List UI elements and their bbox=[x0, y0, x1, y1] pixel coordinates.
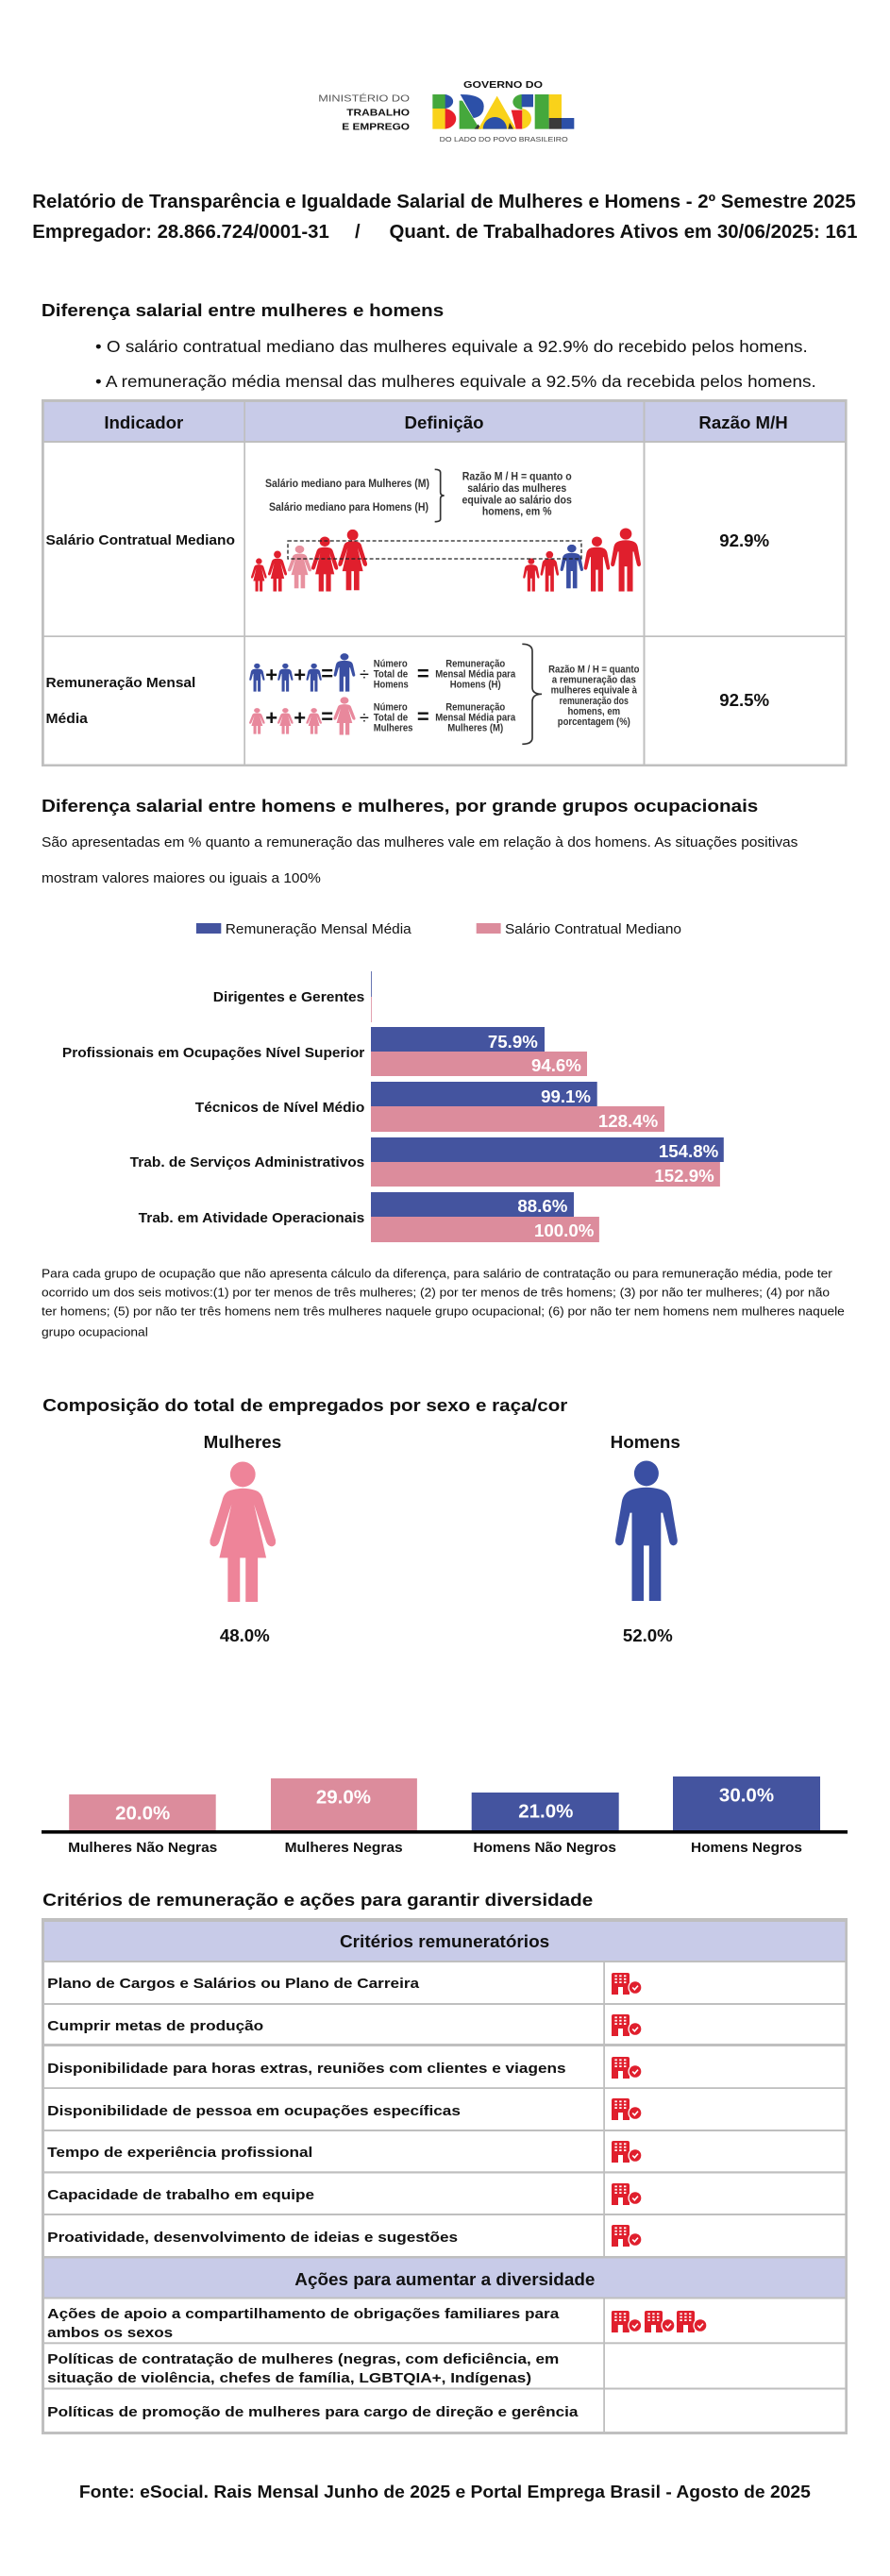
diagram: remuneração média: mulheres equivale à bbox=[551, 685, 637, 697]
diagram: salário mediano: Salário mediano para Homens (H) bbox=[269, 502, 428, 514]
bar chart: grupos ocupacionais: 75.9% bbox=[488, 1032, 538, 1052]
row labels: ações: situação de violência, chefes de família, LGBTQIA+, Indígenas) bbox=[47, 2371, 531, 2386]
text block: nota de rodapé bbox=[42, 1267, 845, 1339]
bar chart: grupos ocupacionais: Técnicos de Nível Médio bbox=[195, 1101, 364, 1116]
bar chart: grupos ocupacionais: 88.6% bbox=[517, 1196, 568, 1216]
panel: homens bbox=[611, 1432, 680, 1645]
text block: explicação: mostram valores maiores ou iguais a 100% bbox=[42, 871, 321, 886]
diagram: remuneração média: homens, em bbox=[567, 706, 620, 717]
row label: remuneração mensal média bbox=[45, 676, 195, 727]
row labels: critérios: Disponibilidade de pessoa em ocupações específicas bbox=[47, 2104, 461, 2119]
diagram: remuneração média: = bbox=[417, 662, 429, 685]
value: 92.5%: 92.5% bbox=[719, 690, 770, 710]
bar chart: grupos ocupacionais: Trab. de Serviços Administrativos bbox=[130, 1155, 364, 1170]
diagram: remuneração média: ÷ bbox=[360, 708, 369, 727]
bar chart: sexo e raça/cor: 21.0% bbox=[518, 1801, 573, 1822]
bar chart: sexo e raça/cor: Mulheres Negras bbox=[285, 1841, 403, 1856]
row labels: critérios: Proatividade, desenvolvimento de ideias e sugestões bbox=[47, 2231, 458, 2246]
row labels: critérios: Cumprir metas de produção bbox=[47, 2019, 263, 2034]
bar chart: grupos ocupacionais: Profissionais em Ocupações Nível Superior bbox=[62, 1046, 365, 1061]
text block: explicação: São apresentadas em % quanto a remuneração das mulheres vale em relação à dos homens. As situações positivas bbox=[42, 835, 798, 850]
bar chart: grupos ocupacionais: 128.4% bbox=[598, 1111, 659, 1131]
diagram: remuneração média: porcentagem (%) bbox=[558, 716, 630, 728]
row labels: ações: ambos os sexos bbox=[47, 2326, 173, 2341]
bar chart: grupos ocupacionais bbox=[62, 971, 724, 1242]
logo: ministério do trabalho e governo do brasil bbox=[318, 80, 574, 143]
title: Quant. de Trabalhadores Ativos em 30/06/2025: 161 bbox=[389, 222, 857, 243]
heading: grupos ocupacionais: Diferença salarial entre homens e mulheres, por grande grupos ocupacionais bbox=[42, 796, 758, 816]
diagram: remuneração média: + bbox=[265, 663, 277, 687]
diagram: remuneração média: remuneração dos bbox=[560, 696, 629, 707]
diagram: remuneração média: + bbox=[294, 663, 306, 687]
diagram: remuneração média: Mulheres (M) bbox=[447, 723, 504, 734]
header: ações para aumentar a diversidade: Ações para aumentar a diversidade bbox=[294, 2269, 595, 2289]
legend: Remuneração Mensal Média bbox=[226, 922, 412, 937]
value: 48.0%: 48.0% bbox=[220, 1625, 270, 1645]
diagram: remuneração média: Mensal Média para bbox=[435, 668, 515, 680]
text block: bullets bbox=[95, 337, 816, 391]
diagram: remuneração média: a remuneração das bbox=[552, 674, 636, 685]
row label: salário contratual mediano: Salário Contratual Mediano bbox=[45, 533, 235, 548]
diagram: remuneração média: Mulheres bbox=[374, 723, 412, 734]
row labels: critérios: Disponibilidade para horas extras, reuniões com clientes e viagens bbox=[47, 2062, 566, 2077]
diagram: remuneração média: Remuneração bbox=[445, 702, 506, 714]
table headers: Razão M/H bbox=[698, 412, 788, 432]
bar chart: grupos ocupacionais: Trab. em Atividade Operacionais bbox=[139, 1211, 364, 1226]
diagram: salário mediano: homens, em % bbox=[482, 507, 552, 518]
panel: tabela indicador bbox=[42, 399, 848, 766]
diagram: remuneração média: Remuneração bbox=[445, 659, 506, 670]
bar chart: sexo e raça/cor: Homens Não Negros bbox=[473, 1841, 616, 1856]
row labels: critérios bbox=[47, 1977, 566, 2246]
diagram: remuneração média: Total de bbox=[374, 712, 408, 723]
diagram: remuneração média bbox=[249, 644, 640, 744]
text block: bullets: • O salário contratual mediano das mulheres equivale a 92.9% do recebido pelos homens. bbox=[95, 337, 808, 356]
heading: critérios: Critérios de remuneração e ações para garantir diversidade bbox=[42, 1890, 593, 1910]
text block: nota de rodapé: ter homens; (5) por não ter três homens nem três mulheres naquele grupo ocupacional; (6) por não ter nem homens nem mulheres naquele bbox=[42, 1305, 845, 1318]
heading: composição: Composição do total de empregados por sexo e raça/cor bbox=[42, 1395, 567, 1415]
bar chart: grupos ocupacionais: Dirigentes e Gerentes bbox=[213, 990, 364, 1005]
bar chart: sexo e raça/cor: Homens Negros bbox=[691, 1841, 802, 1856]
text block: nota de rodapé: ocorrido um dos seis motivos:(1) por ter menos de três mulheres; (2) por ter menos de três homens; (3) por não ter mulheres; (4) por não bbox=[42, 1286, 830, 1299]
value: 92.9%: 92.9% bbox=[719, 530, 770, 550]
logo: ministério do trabalho e governo do brasil: E EMPREGO bbox=[342, 123, 410, 132]
row labels: critérios: Plano de Cargos e Salários ou Plano de Carreira bbox=[47, 1977, 420, 1992]
diagram: salário mediano: Salário mediano para Mulheres (M) bbox=[265, 479, 429, 490]
row labels: critérios: Capacidade de trabalho em equipe bbox=[47, 2188, 314, 2203]
table headers: Definição bbox=[405, 412, 483, 432]
diagram: remuneração média: Número bbox=[374, 659, 408, 670]
diagram: remuneração média: + bbox=[294, 706, 306, 730]
title: Empregador: 28.866.724/0001-31 bbox=[32, 222, 329, 243]
bar chart: grupos ocupacionais: 154.8% bbox=[659, 1141, 719, 1161]
row labels: ações: Ações de apoio a compartilhamento de obrigações familiares para bbox=[47, 2307, 560, 2322]
bar chart: grupos ocupacionais: 94.6% bbox=[531, 1055, 581, 1075]
row labels: critérios: Tempo de experiência profissional bbox=[47, 2146, 312, 2161]
icons: empresa com ações bbox=[612, 2311, 708, 2332]
value: 52.0%: 52.0% bbox=[623, 1625, 673, 1645]
header: critérios remuneratórios: Critérios remuneratórios bbox=[340, 1931, 549, 1951]
diagram: remuneração média: Homens bbox=[374, 680, 409, 691]
title bbox=[32, 192, 858, 243]
text block: bullets: • A remuneração média mensal das mulheres equivale a 92.5% da recebida pelos homens. bbox=[95, 372, 816, 391]
diagram: salário mediano: salário das mulheres bbox=[467, 483, 566, 495]
diagram: remuneração média: Total de bbox=[374, 668, 408, 680]
bar chart: sexo e raça/cor bbox=[42, 1776, 848, 1856]
diagram: salário mediano: Razão M / H = quanto o bbox=[462, 472, 572, 483]
icon: mulher bbox=[210, 1461, 276, 1602]
icon: homem bbox=[615, 1460, 678, 1601]
diagram: remuneração média: = bbox=[321, 704, 333, 729]
diagram: remuneração média: Número bbox=[374, 702, 408, 714]
logo: ministério do trabalho e governo do brasil: GOVERNO DO bbox=[463, 80, 543, 91]
diagram: salário mediano bbox=[251, 469, 641, 592]
row label: remuneração mensal média: Média bbox=[45, 712, 89, 727]
diagram: remuneração média: Razão M / H = quanto bbox=[548, 665, 640, 676]
text block: nota de rodapé: grupo ocupacional bbox=[42, 1325, 148, 1339]
bar chart: grupos ocupacionais: 99.1% bbox=[541, 1086, 591, 1106]
row label: remuneração mensal média: Remuneração Mensal bbox=[45, 676, 195, 691]
icons: empresa com critério bbox=[612, 1973, 643, 2247]
logo: ministério do trabalho e governo do brasil: TRABALHO bbox=[346, 108, 410, 119]
bar chart: grupos ocupacionais: 100.0% bbox=[534, 1221, 595, 1240]
table headers: Indicador bbox=[104, 412, 183, 432]
source note: Fonte: eSocial. Rais Mensal Junho de 2025 e Portal Emprega Brasil - Agosto de 2025 bbox=[79, 2482, 811, 2501]
panel: mulheres: Mulheres bbox=[204, 1432, 281, 1452]
row labels: ações: Políticas de promoção de mulheres para cargo de direção e gerência bbox=[47, 2405, 579, 2420]
bar chart: grupos ocupacionais: 152.9% bbox=[654, 1166, 714, 1186]
legend bbox=[196, 922, 681, 937]
diagram: remuneração média: = bbox=[321, 662, 333, 685]
text block: nota de rodapé: Para cada grupo de ocupação que não apresenta cálculo da diferença, para salário de contratação ou para remuneração média, pode ter bbox=[42, 1267, 832, 1280]
diagram: remuneração média: + bbox=[265, 706, 277, 730]
legend: Salário Contratual Mediano bbox=[505, 922, 681, 937]
heading: diferença salarial: Diferença salarial entre mulheres e homens bbox=[42, 300, 444, 320]
logo: ministério do trabalho e governo do brasil: MINISTÉRIO DO bbox=[318, 93, 410, 104]
title: / bbox=[355, 222, 361, 243]
diagram: salário mediano: equivale ao salário dos bbox=[462, 495, 572, 506]
panel: homens: Homens bbox=[611, 1432, 680, 1452]
table headers bbox=[104, 412, 788, 432]
diagram: remuneração média: Homens (H) bbox=[450, 680, 501, 691]
bar chart: sexo e raça/cor: 30.0% bbox=[719, 1784, 774, 1807]
logo: ministério do trabalho e governo do brasil: DO LADO DO POVO BRASILEIRO bbox=[440, 135, 568, 143]
bar chart: sexo e raça/cor: 29.0% bbox=[316, 1786, 371, 1809]
diagram: remuneração média: Mensal Média para bbox=[435, 712, 515, 723]
bar chart: sexo e raça/cor: 20.0% bbox=[115, 1803, 170, 1824]
row labels: ações: Políticas de contratação de mulheres (negras, com deficiência, em bbox=[47, 2352, 559, 2367]
panel: tabela critérios e ações bbox=[42, 1918, 848, 2434]
row labels: ações bbox=[47, 2307, 579, 2420]
text block: explicação bbox=[42, 835, 798, 886]
bar chart: sexo e raça/cor: Mulheres Não Negras bbox=[68, 1841, 217, 1856]
diagram: remuneração média: = bbox=[417, 704, 429, 729]
panel: mulheres bbox=[204, 1432, 281, 1645]
title: Relatório de Transparência e Igualdade Salarial de Mulheres e Homens - 2º Semestre 2025 bbox=[32, 192, 856, 212]
diagram: remuneração média: ÷ bbox=[360, 665, 369, 683]
